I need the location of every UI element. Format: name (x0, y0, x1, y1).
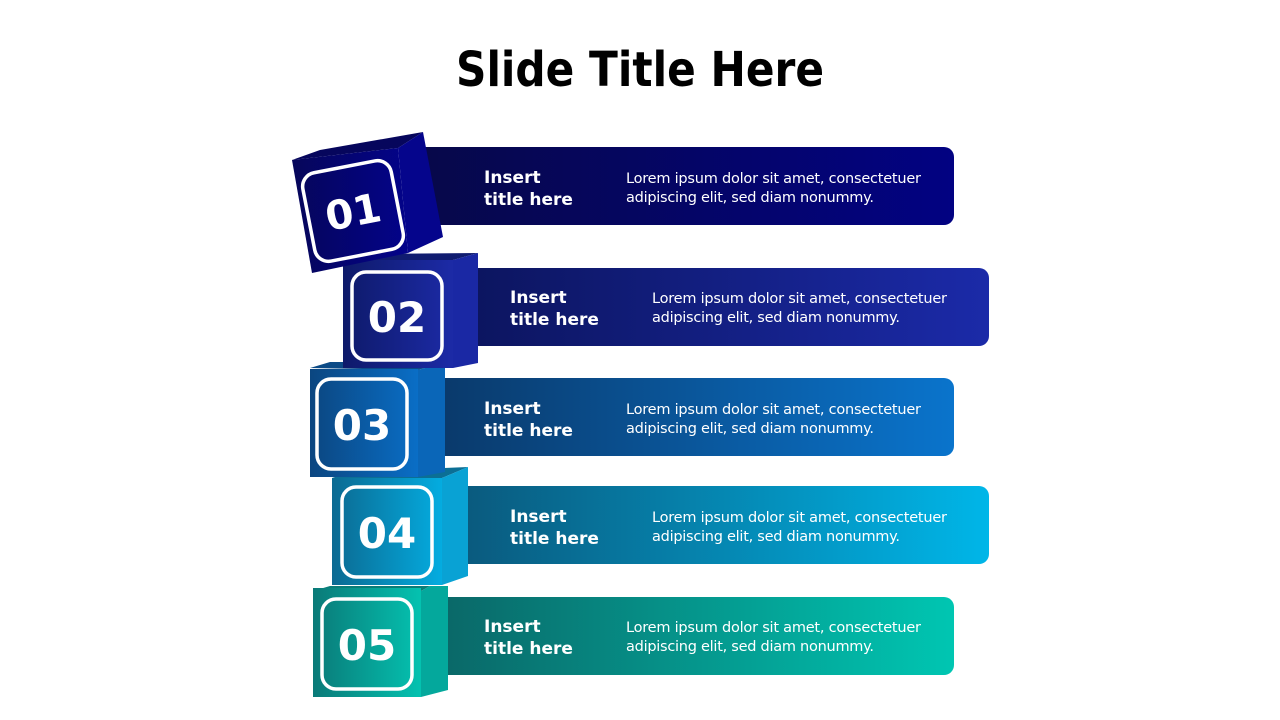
banner 3: Insert (484, 399, 541, 419)
banner 1: title here (484, 190, 573, 210)
cube 5 (313, 586, 448, 697)
banner 3 (445, 378, 954, 456)
banner 2: Insert (510, 288, 567, 308)
cube 2 (343, 253, 478, 368)
cube 1 (292, 132, 443, 273)
banner 4: adipiscing elit, sed diam nonummy. (652, 529, 900, 545)
banner 5: Insert (484, 617, 541, 637)
banner 5: title here (484, 639, 573, 659)
banner 2: title here (510, 310, 599, 330)
banner 1: Insert (484, 168, 541, 188)
cube 4: 04 (358, 509, 416, 558)
banner 2 (475, 268, 989, 346)
title: Slide Title Here (456, 42, 824, 98)
cube 1: 01 (322, 185, 385, 241)
banner 2: adipiscing elit, sed diam nonummy. (652, 310, 900, 326)
banner 4: title here (510, 529, 599, 549)
banner 1: Lorem ipsum dolor sit amet, consectetuer (626, 171, 921, 187)
cube 4 (332, 467, 468, 585)
banner 5: adipiscing elit, sed diam nonummy. (626, 639, 874, 655)
banner 2: Lorem ipsum dolor sit amet, consectetuer (652, 291, 947, 307)
banner 3: title here (484, 421, 573, 441)
cube 5: 05 (338, 621, 396, 670)
cube 2: 02 (368, 293, 426, 342)
banner 4 (465, 486, 989, 564)
cube 3: 03 (333, 401, 391, 450)
cube 3 (310, 362, 445, 477)
banner 4: Lorem ipsum dolor sit amet, consectetuer (652, 510, 947, 526)
banner 1: adipiscing elit, sed diam nonummy. (626, 190, 874, 206)
banner 1 (425, 147, 954, 225)
banner 3: Lorem ipsum dolor sit amet, consectetuer (626, 402, 921, 418)
banner 5 (445, 597, 954, 675)
banner 3: adipiscing elit, sed diam nonummy. (626, 421, 874, 437)
banner 5: Lorem ipsum dolor sit amet, consectetuer (626, 620, 921, 636)
banner 4: Insert (510, 507, 567, 527)
